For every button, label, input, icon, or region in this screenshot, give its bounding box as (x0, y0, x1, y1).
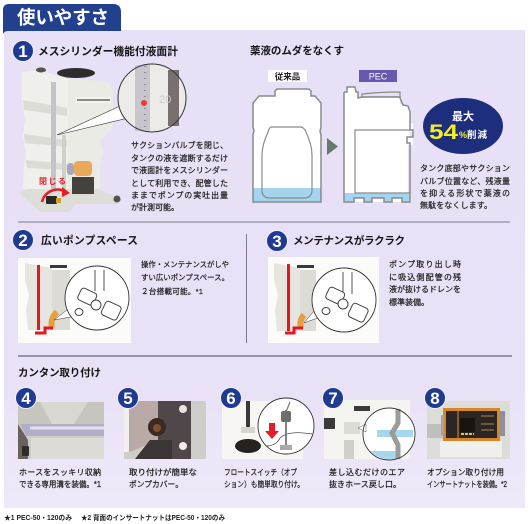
caption: item 4: できる専用溝を装備。*1 (19, 479, 102, 489)
number badge 2: 2 (18, 231, 28, 250)
description: chemical waste: を抑える形状で薬液の (420, 188, 510, 198)
number badge 6: 6 (226, 389, 236, 408)
divider line (18, 355, 512, 357)
number badge 3: 3 (272, 232, 282, 251)
divider line (246, 234, 248, 343)
number badge 4: 4 (21, 389, 31, 408)
number badge 7: 7 (328, 389, 338, 408)
panel: item 4 hose storage (16, 388, 104, 489)
callout: up to 54% reduction: % (459, 130, 467, 140)
caption: item 8: オプション取り付け用 (427, 467, 504, 477)
description: feature 1: サクションバルブを閉じ、 (131, 140, 228, 150)
heading: feature 3: メンテナンスがラクラク (293, 234, 405, 247)
caption: item 4 (19, 467, 102, 489)
description: feature 2: ２台搭載可能。*1 (141, 286, 203, 296)
description: feature 1: として利用でき、配管した (131, 178, 228, 188)
photo: pump cover (124, 401, 206, 459)
description: feature 3: 標準装備。 (389, 297, 429, 307)
description: feature 3: に吸込側配管の残 (389, 272, 461, 282)
description: chemical waste (420, 164, 510, 210)
description: chemical waste: タンク底部やサクション (420, 164, 510, 173)
heading: easy installation: カンタン取り付け (18, 366, 101, 379)
photo: hose groove (18, 402, 104, 459)
description: feature 2 (141, 259, 229, 296)
caption: item 6 (224, 468, 304, 489)
description: chemical waste: 無駄をなくします。 (420, 200, 492, 210)
description: feature 2: 操作・メンテナンスがしや (141, 259, 229, 269)
panel: item 7 air release port (322, 388, 415, 489)
magnifier: gauge close-up (57, 64, 186, 135)
label: conventional product (268, 70, 307, 82)
diagram: conventional tank (253, 89, 321, 202)
footnotes: ★1 PEC-50・120のみ (4, 514, 72, 522)
photo: pump space with magnifier (18, 258, 131, 343)
callout: up to 54% reduction: 最大 (452, 109, 474, 123)
caption: item 4: ホースをスッキリ収納 (19, 467, 101, 477)
photo: float switch with magnifier (222, 398, 314, 459)
panel: item 6 float switch (220, 388, 314, 489)
magnifier: gauge close-up: 20 (159, 94, 171, 106)
heading: feature 1: メスシリンダー機能付液面計 (38, 44, 178, 58)
description: feature 3: ポンプ取り出し時 (389, 259, 461, 269)
caption: item 5: ポンプカバー。 (129, 480, 183, 489)
panel: item 5 pump cover (118, 388, 206, 489)
panel: feature 3 easy maintenance (266, 230, 461, 343)
caption: item 5 (129, 467, 197, 489)
callout: up to 54% reduction: 54 (429, 121, 458, 144)
description: feature 1 (131, 140, 228, 212)
description: feature 1: が計測可能。 (131, 202, 179, 212)
description: feature 3 (389, 259, 461, 307)
panel: item 8 insert nut (424, 388, 510, 489)
caption: item 7: 抜きホース戻し口。 (329, 479, 401, 489)
panel: no wasted chemical (250, 44, 510, 210)
heading: chemical waste: 薬液のムダをなくす (250, 44, 344, 57)
panel: feature 1 liquid level gauge (12, 40, 228, 212)
caption: item 6: ション）も簡単取り付け。 (224, 479, 304, 489)
number badge 2 (12, 230, 34, 250)
divider line (18, 221, 510, 223)
label: PEC (359, 70, 397, 82)
number badge 1: 1 (18, 42, 28, 61)
photo: controller on tank (427, 401, 510, 459)
caption: item 5: 取り付けが簡単な (129, 467, 197, 477)
description: feature 1: で液面計をメスシリンダー (131, 165, 228, 175)
title tab: 使いやすさ (17, 7, 109, 28)
caption: item 6: フロートスイッチ（オプ (224, 468, 297, 477)
description: feature 1: ままでポンプの実吐出量 (131, 190, 228, 200)
number badge 5: 5 (123, 389, 133, 408)
caption: item 7: 差し込むだけのエア (329, 467, 405, 477)
footnotes (4, 513, 225, 522)
caption: item 8 (427, 467, 507, 489)
description: feature 3: 液が抜けるドレンを (389, 284, 461, 294)
title tab (3, 4, 121, 34)
photo: pump tank unit (19, 68, 122, 212)
number badge 1 (12, 40, 34, 62)
number badge 3 (266, 230, 288, 252)
photo: air release port with magnifier (324, 400, 415, 460)
caption: item 7 (329, 467, 405, 489)
description: feature 2: すい広いポンプスペース。 (141, 273, 229, 282)
label: PEC: PEC (369, 72, 388, 82)
diagram: PEC tank (344, 87, 413, 202)
panel: feature 2 wide pump space (12, 230, 229, 343)
photo: drain with magnifier (268, 257, 379, 343)
heading: feature 2: 広いポンプスペース (41, 235, 138, 247)
caption: item 8: インサートナットを装備。*2 (427, 479, 507, 489)
photo: pump tank unit: 閉じる (39, 177, 66, 186)
callout: up to 54% reduction: 削減 (467, 129, 487, 141)
footnotes: ★2 背面のインサートナットはPEC-50・120のみ (81, 513, 225, 522)
callout: up to 54% reduction (423, 98, 503, 154)
number badge 8: 8 (430, 389, 440, 408)
description: feature 1: タンクの液を遮断するだけ (131, 153, 228, 163)
description: chemical waste: バルブ位置など、残液量 (420, 176, 510, 186)
arrow: comparison (327, 138, 338, 155)
label: conventional product: 従来品 (275, 72, 300, 82)
